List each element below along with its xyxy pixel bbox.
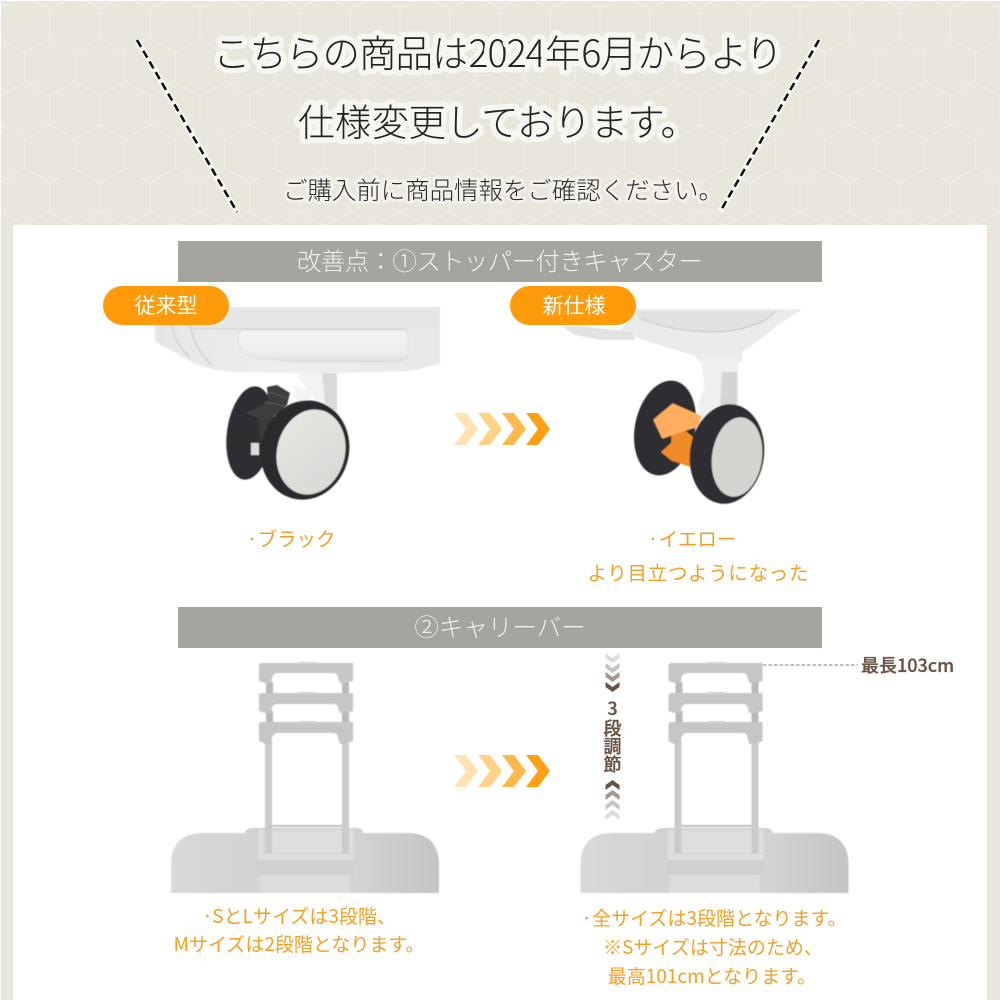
caption: new carry bar [581, 904, 847, 989]
vertical text: 3 [607, 695, 618, 721]
pill label: previous: 従来型 [134, 290, 198, 320]
section heading: caster [178, 241, 822, 282]
caption: previous carry bar: ·SとLサイズは3段階、 [202, 902, 396, 929]
title: こちらの商品は2024年6月からより [213, 23, 783, 78]
caption: yellow: ·イエロー [648, 523, 736, 552]
caption: black: ·ブラック [247, 523, 335, 552]
caption: new carry bar: ·全サイズは3段階となります。 [581, 904, 847, 931]
arrow: carry bar comparison [454, 755, 550, 787]
pill label: previous [103, 286, 229, 325]
downward chevrons [606, 653, 620, 692]
caption: new carry bar: ※Sサイズは寸法のため、 [603, 933, 823, 960]
vertical text: 節 [604, 751, 622, 777]
caption: yellow [588, 523, 808, 586]
dashed line: right [720, 40, 819, 212]
caption: yellow: より目立つようになった [588, 557, 808, 586]
title: 仕様変更しております。 [298, 92, 698, 147]
upward chevrons [606, 780, 620, 820]
photo: previous carry bar [171, 662, 439, 893]
caption: new carry bar: 最高101cmとなります。 [608, 962, 816, 989]
subtitle: ご購入前に商品情報をご確認ください。 [283, 172, 723, 207]
section heading: carry bar: ②キャリーバー [414, 609, 586, 644]
photo: previous black-stopper caster [155, 307, 440, 509]
three-step adjustment label [604, 653, 622, 820]
section heading: caster: 改善点：①ストッパー付きキャスター [297, 243, 703, 278]
vertical text: 段 [604, 715, 622, 741]
white content panel [13, 225, 987, 1000]
vertical text: 調 [604, 733, 622, 759]
title [213, 23, 783, 147]
height callout: 103 cm: 最長103cm [861, 652, 954, 678]
vertical text [604, 695, 622, 777]
arrow: caster comparison [454, 413, 550, 445]
photo: new yellow-stopper caster [563, 309, 803, 509]
dashed line: left [137, 40, 237, 212]
photo: new carry bar [580, 662, 848, 893]
section heading: carry bar [178, 607, 822, 648]
caption: previous carry bar [174, 902, 424, 957]
pill label: new spec: 新仕様 [542, 290, 606, 320]
pill label: new spec [510, 286, 636, 325]
caption: previous carry bar: Mサイズは2段階となります。 [174, 930, 424, 957]
